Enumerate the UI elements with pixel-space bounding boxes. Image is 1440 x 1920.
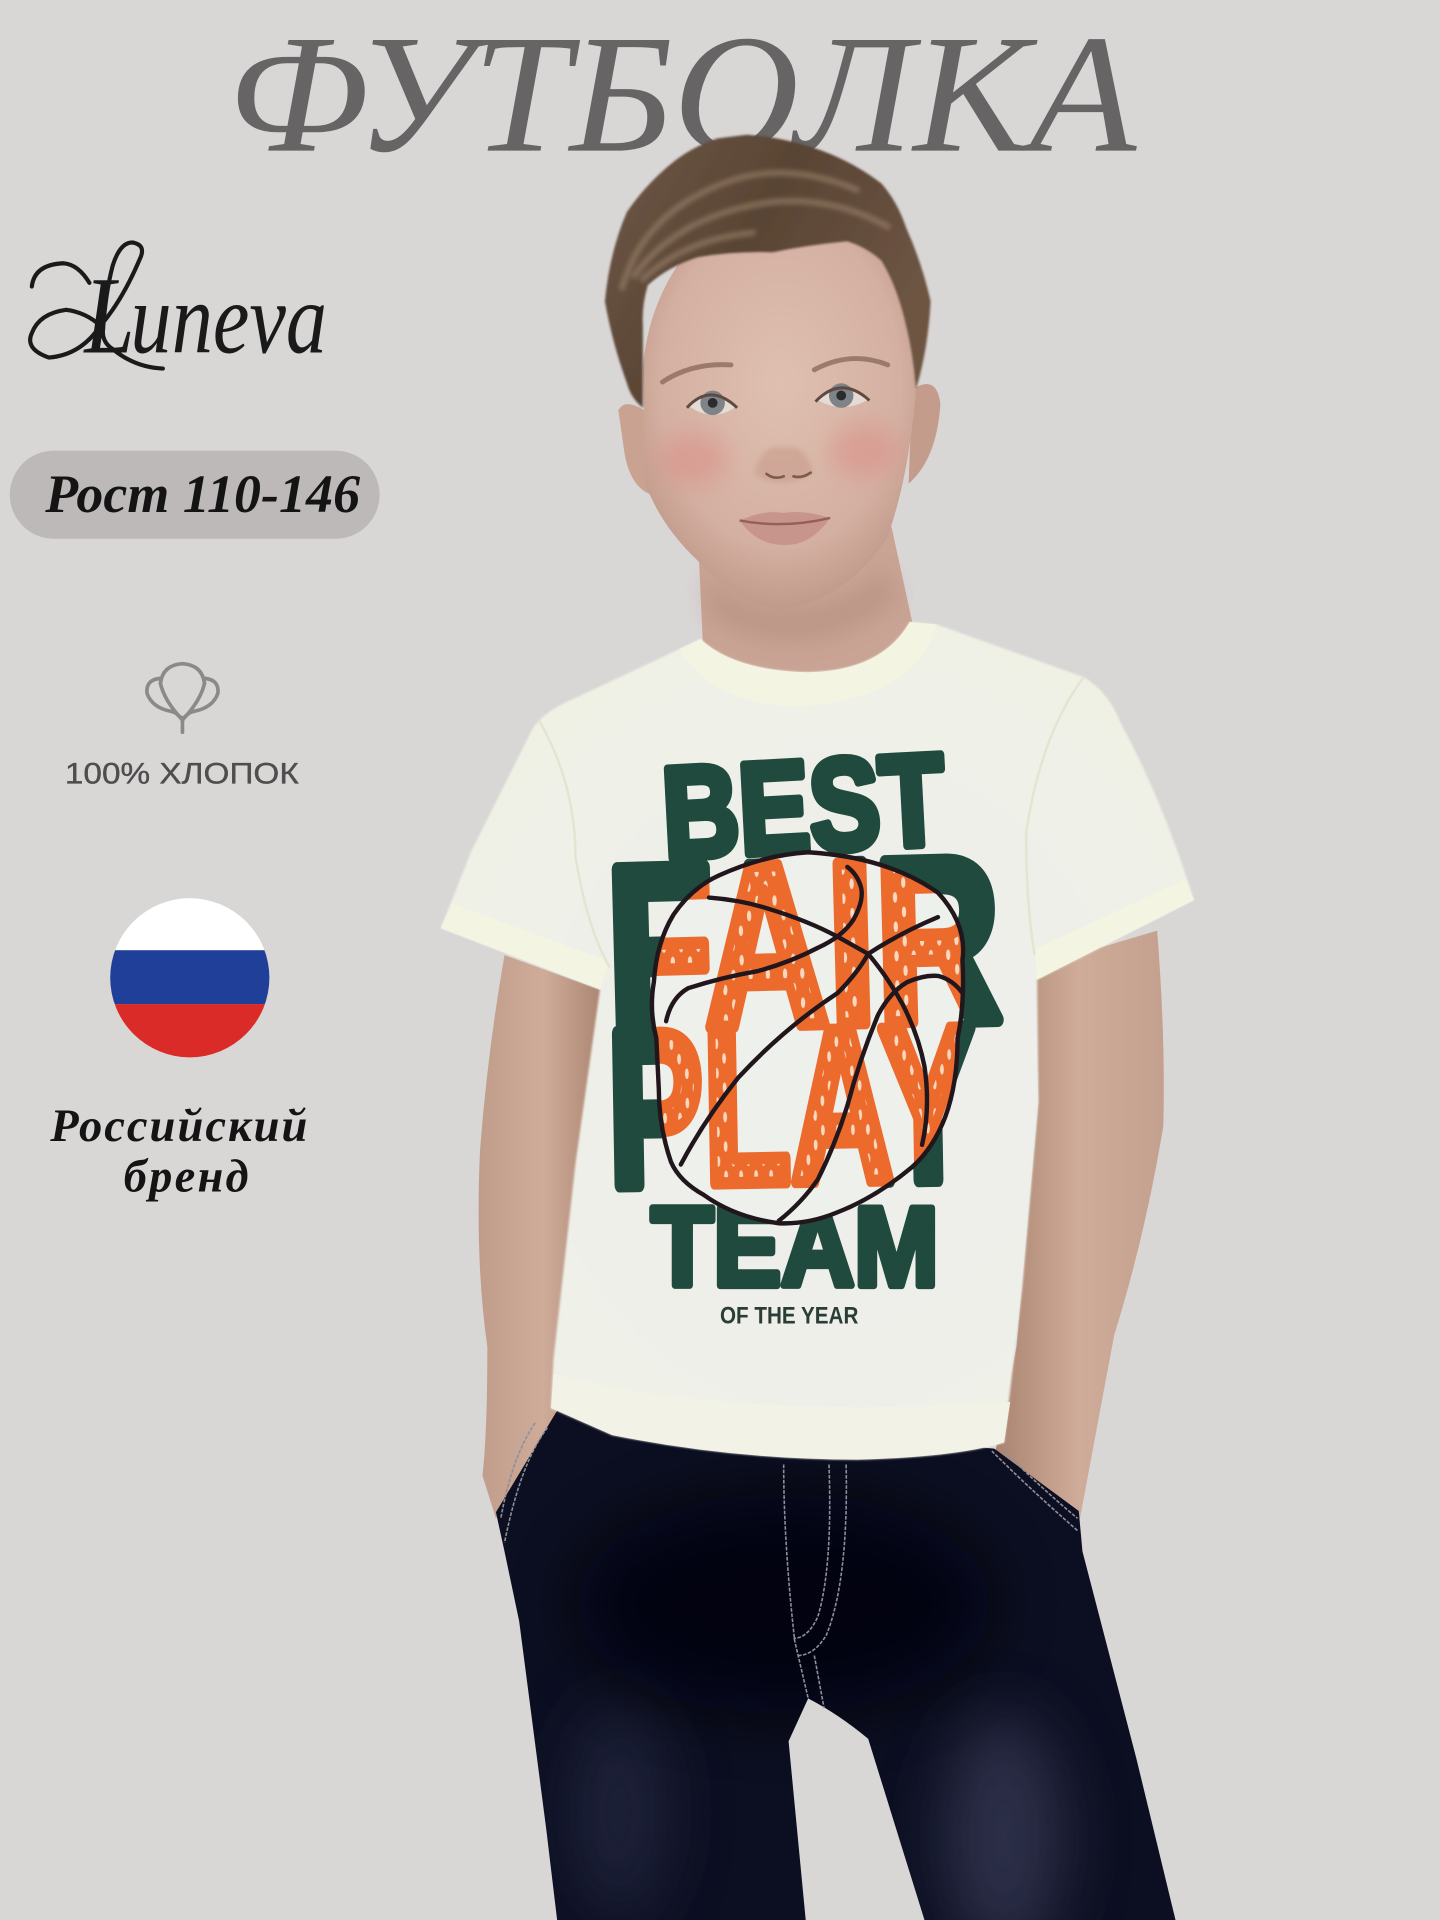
ball fill: FAIR	[604, 810, 1003, 1080]
right eye	[816, 383, 869, 408]
nose	[754, 447, 813, 483]
left arm	[479, 955, 606, 1518]
head	[605, 135, 940, 610]
print word: play: PLAY	[606, 980, 977, 1233]
hair strands	[622, 173, 888, 288]
cheeks	[659, 432, 727, 486]
pill background	[10, 451, 380, 539]
print word: fair: FAIR	[604, 810, 1003, 1080]
ball fill: PLAY	[606, 980, 977, 1233]
brand label: бренд	[124, 1151, 249, 1202]
neck	[692, 527, 921, 692]
illustration: boy in t-shirt	[441, 135, 1194, 1920]
jeans stitching	[501, 1423, 1078, 1708]
jeans shading	[569, 1494, 1065, 1920]
sleeve seams	[539, 677, 1084, 967]
brand label	[49, 1101, 307, 1202]
title: ФУТБОЛКА	[228, 0, 1137, 188]
print word: best: BEST	[659, 728, 948, 887]
cotton label: 100% ХЛОПОК	[65, 758, 299, 791]
logo swash	[30, 242, 163, 369]
russian brand badge	[49, 894, 307, 1202]
lips	[740, 512, 830, 545]
brand logo: Luneva	[30, 242, 327, 377]
right arm	[994, 931, 1164, 1518]
neck shadow	[704, 569, 898, 642]
cotton material badge	[65, 664, 299, 791]
ball lines	[652, 852, 963, 1223]
logo wordmark: uneva	[131, 263, 327, 375]
icon: russian flag	[110, 898, 270, 1058]
logo wordmark: L	[83, 254, 135, 377]
size pill	[10, 451, 380, 539]
ball fill	[656, 854, 961, 1221]
basketball	[650, 850, 966, 1226]
print word: team: TEAM	[651, 1184, 939, 1310]
print tagline: OF THE YEAR	[720, 1303, 859, 1330]
size label: Рост 110-146	[44, 464, 360, 524]
t-shirt	[441, 622, 1194, 1460]
jeans	[496, 1411, 1176, 1920]
icon: cotton	[147, 664, 218, 732]
collar	[680, 622, 937, 707]
hem	[551, 1374, 1010, 1460]
face	[643, 233, 918, 610]
shirt body	[441, 622, 1194, 1460]
sleeve cuffs	[441, 904, 610, 989]
eyebrows	[662, 359, 888, 382]
ears	[618, 404, 655, 496]
brand label: Российский	[49, 1101, 307, 1152]
print: best fair play team	[604, 728, 1003, 1310]
hair	[605, 135, 931, 408]
left eye	[687, 391, 737, 415]
